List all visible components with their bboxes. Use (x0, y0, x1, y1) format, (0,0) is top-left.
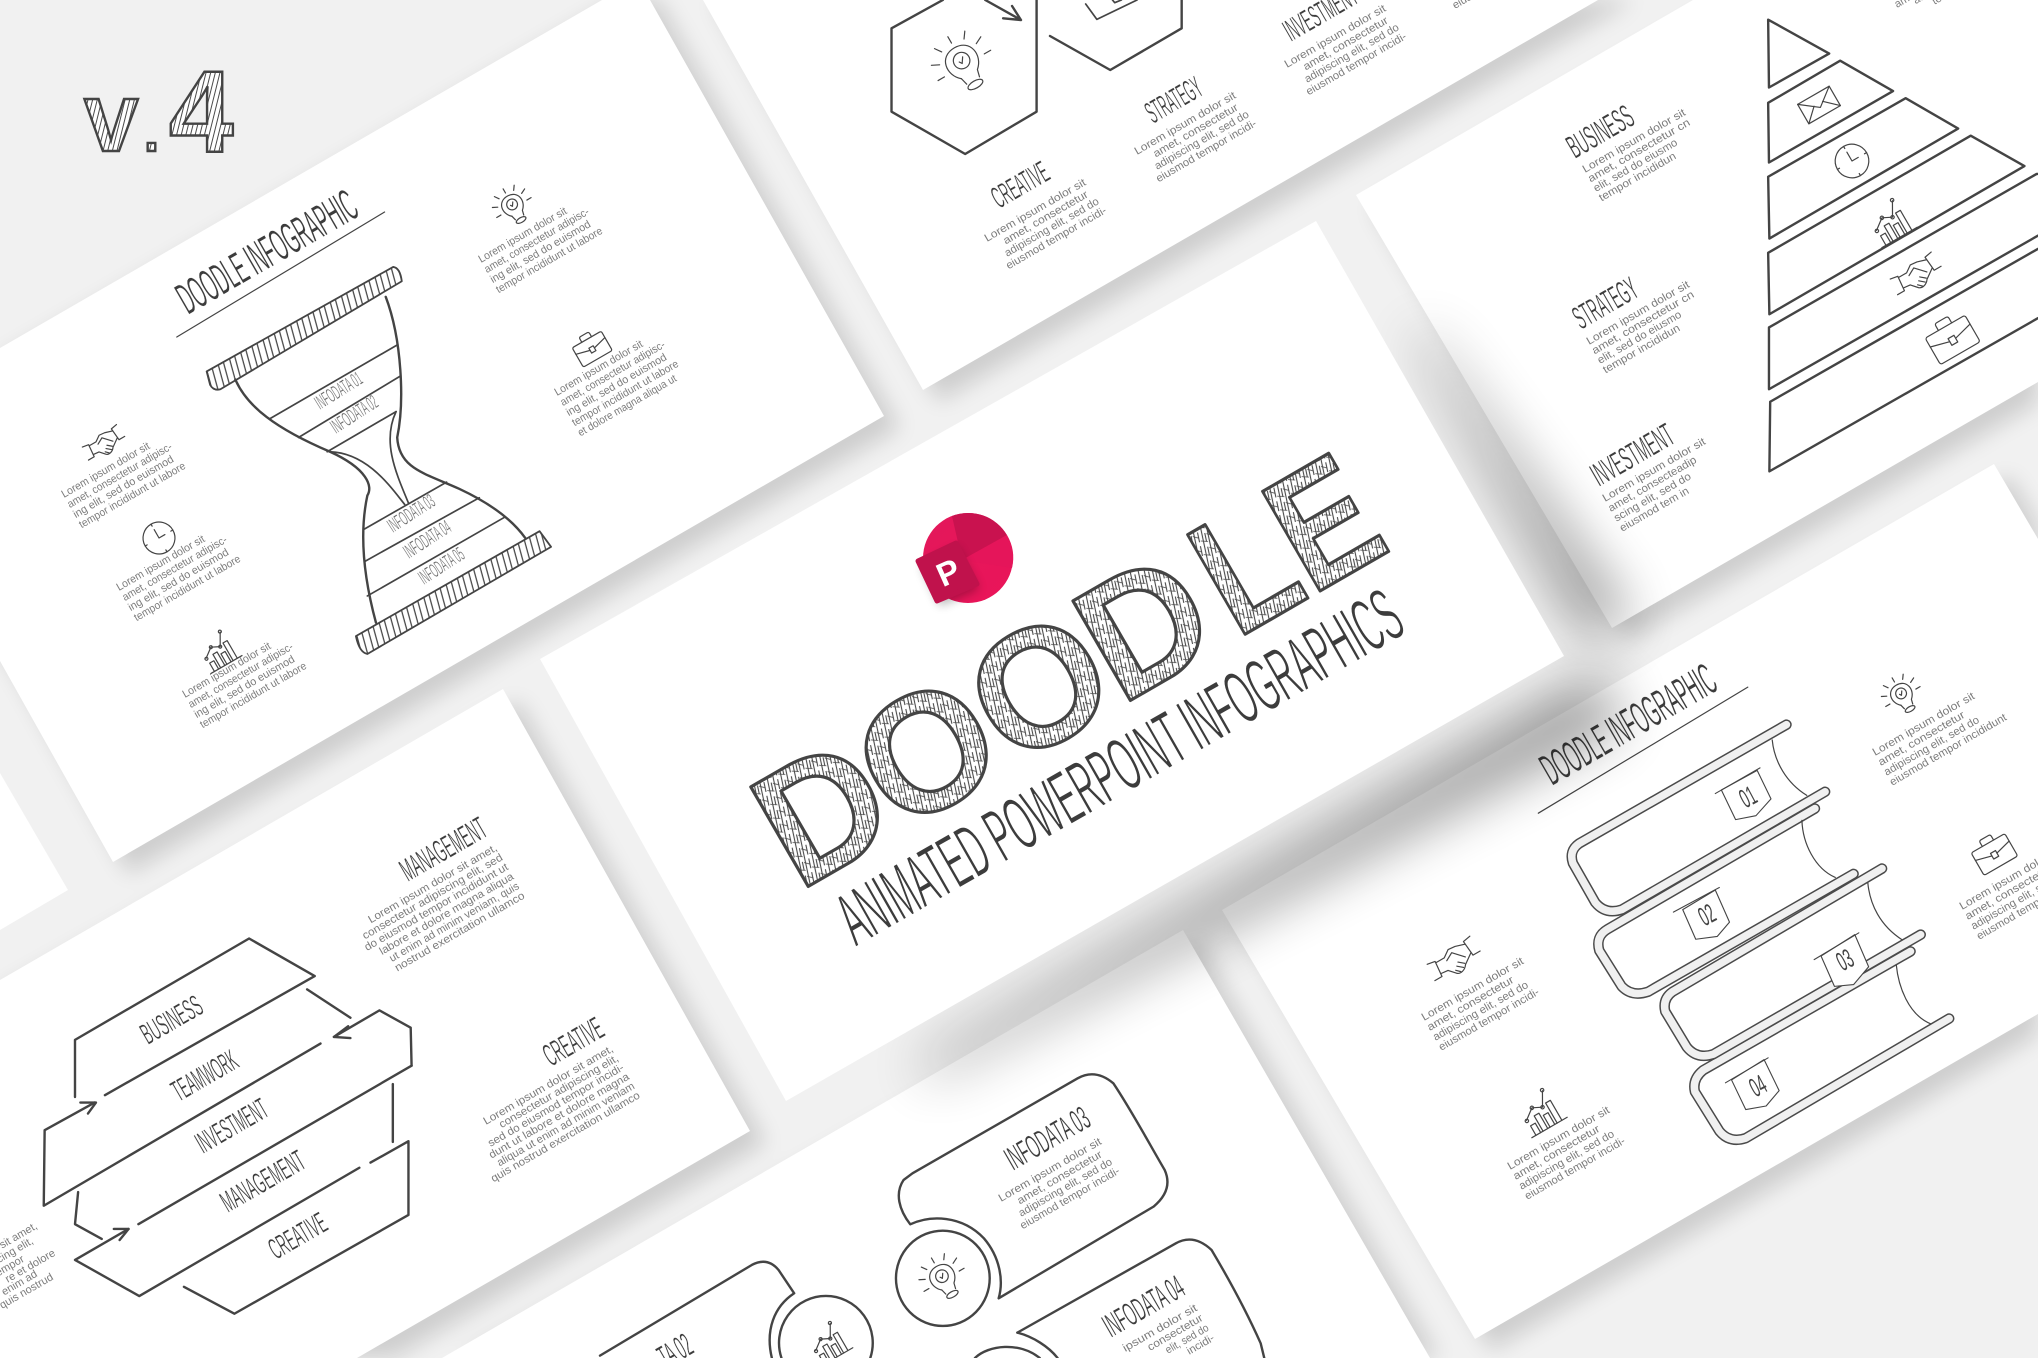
tag number 01: 01 (1734, 780, 1762, 814)
panel: cycle arrows slide: MANAGEMENT (394, 810, 493, 888)
text block: infodata 04: incidi- (1185, 1332, 1217, 1357)
stacked books diagram (1538, 687, 1949, 1140)
text block: creative: sed do eiusmod tempor incidi- (486, 1062, 626, 1150)
icon: bulb (922, 22, 1004, 103)
text block: business: Lorem ipsum dolor sit (1580, 107, 1688, 176)
text block: strategy: adipiscing elit, sed do (1153, 109, 1251, 173)
text block: chart: Lorem ipsum dolor sit (180, 640, 273, 701)
icon: bulb (911, 1246, 974, 1308)
text block: clock (114, 523, 243, 624)
text block: clipped at left edge: re et dolore (3, 1247, 58, 1285)
icon: briefcase (1921, 309, 1980, 365)
panel: cycle arrows slide: TEAMWORK (166, 1044, 244, 1108)
text block: investment: amet, consecteadip (1606, 454, 1699, 515)
bubble diagram (600, 1074, 1264, 1358)
panel: speech bubbles slide: INFODATA 04 (1096, 1268, 1191, 1344)
icon: clock (137, 516, 181, 560)
panel: pyramid slide: INVESTMENT (1584, 416, 1680, 493)
panel: cycle arrows slide: INVESTMENT (190, 1092, 274, 1160)
panel: cycle arrows slide: BUSINESS (135, 989, 209, 1051)
text block: infodata 03: eiusmod tempor incidi- (1018, 1165, 1122, 1232)
text block: creative: consectetur adipiscing elit, (497, 1052, 621, 1131)
text block: clock: Lorem ipsum dolor sit (114, 533, 207, 594)
text block: creative: eiusmod tempor incidi- (1004, 204, 1109, 272)
icon: chart (1513, 1085, 1567, 1138)
text block: infodata 03: adipiscing elit, sed do (1017, 1156, 1114, 1220)
text block: management: nostrud exercitation ullamco (393, 890, 527, 974)
panel: hourglass slide: INFODATA 04 (400, 516, 455, 563)
title: doodle: DOOD (724, 516, 1243, 923)
text block: business: amet, consectetur cn (1586, 117, 1692, 185)
text block: creative (982, 175, 1109, 274)
panel: hourglass slide (0, 0, 884, 862)
text block: strategy: amet, consectetur (1151, 101, 1241, 160)
text block: investment: adipiscing elit, sed do (1303, 22, 1401, 86)
text block: clock: tempor incididunt ut labore (132, 553, 243, 624)
text block: creative: amet, consectetur (1001, 188, 1091, 247)
text block: chart (1506, 1104, 1629, 1202)
panel: speech bubbles slide (442, 930, 1430, 1358)
icon: chart (1863, 195, 1917, 248)
text block: management: consectetur adipiscing elit, sed (360, 852, 505, 942)
text block: handshake: Lorem ipsum dolor sit (60, 440, 152, 501)
panel: hexagon slide (703, 0, 1598, 390)
text block: creative: adipiscing elit, sed do (1003, 196, 1101, 260)
text block: bulb: amet, consectetur (1876, 709, 1967, 769)
version label: 4 (169, 47, 234, 177)
text block: management: labore et dolore magna aliqua (377, 870, 517, 958)
icon: powerpoint logo (918, 513, 1013, 606)
text block: infodata 03 (996, 1135, 1122, 1234)
panel: pyramid slide: STRATEGY (1566, 270, 1644, 336)
text block: chart: amet, consectetur (1511, 1123, 1602, 1183)
text block: creative: Lorem ipsum dolor sit amet, (481, 1043, 616, 1128)
panel: hexagon slide: CREATIVE (985, 154, 1055, 215)
text block: investment: eiusmod tempor incidi- (1304, 30, 1409, 98)
panel: cycle arrows slide: CREATIVE (263, 1206, 333, 1266)
text block: bulb (1870, 682, 2009, 788)
text block: chart: tempor incididunt ut labore (198, 660, 309, 731)
hexagon diagram (892, 0, 1182, 154)
text block: clipped at left edge: enim ad (0, 1268, 40, 1298)
text block: briefcase: ing elit, sed do euismod (564, 351, 669, 419)
icon: clock (1829, 138, 1875, 184)
text block: infodata 04 (1121, 1302, 1217, 1358)
panel: hexagon slide: STRATEGY (1139, 70, 1208, 130)
panel: small slide at left edge (0, 773, 68, 930)
tag number 03: 03 (1831, 943, 1859, 977)
text block: bulb: Lorem ipsum dolor sit (1870, 690, 1977, 759)
icon: handshake (1424, 935, 1485, 986)
icon: briefcase (569, 326, 612, 367)
text block: clock: ing elit, sed do euismod (126, 546, 231, 614)
panel: cycle arrows slide: CREATIVE (536, 1010, 610, 1073)
text block: strategy: Lorem ipsum dolor sit (1132, 90, 1238, 158)
hourglass diagram (177, 212, 551, 654)
text block: business (1580, 107, 1704, 204)
title: doodle: LE (1162, 419, 1412, 670)
text block: strategy: elit, sed do eiusmo (1596, 309, 1684, 367)
text block: creative: quis nostrud exercitation ullamco (489, 1090, 642, 1185)
text block: briefcase (1958, 844, 2038, 942)
panel: pyramid slide: BUSINESS (1560, 98, 1640, 165)
panel: cycle arrows slide (0, 689, 750, 1358)
icon: handshake (1888, 251, 1945, 300)
text block: strategy: eiusmod tempor incidi- (1154, 117, 1259, 185)
text block: briefcase: amet, consectetur adipisc- (558, 339, 668, 409)
version label: . (144, 103, 159, 163)
text block: bulb: amet, consectetur adipisc- (482, 206, 592, 276)
text block: chart: amet, consectetur adipisc- (186, 641, 296, 711)
text block: clipped at left edge (0, 1220, 58, 1312)
text block: creative: aliqua ut enim ad minim veniam (495, 1080, 637, 1169)
panel: hourglass slide: INFODATA 02 (327, 391, 382, 438)
icon: chart (805, 1318, 853, 1358)
text block: business: elit, sed do eiusmo (1592, 137, 1680, 195)
icon: briefcase (1968, 828, 2018, 875)
text block: creative: Lorem ipsum dolor sit (982, 177, 1088, 245)
text block: briefcase (552, 328, 687, 439)
icon: chart (194, 627, 242, 674)
text block: bulb: ing elit, sed do euismod (488, 218, 593, 286)
tag number 04: 04 (1744, 1069, 1772, 1103)
panel: books slide: DOODLE INFOGRAPHIC (1532, 653, 1725, 795)
panel: cycle arrows slide: MANAGEMENT (215, 1144, 311, 1219)
text block: clock: amet, consectetur adipisc- (120, 534, 230, 604)
text block: bulb (476, 195, 605, 296)
text block: strategy: amet, consectetur cn (1590, 289, 1696, 357)
text block: investment: eiusmod tem in (1618, 485, 1691, 534)
text block: chart: ing elit, sed do euismod (192, 653, 297, 721)
panel: speech bubbles slide: INFODATA 03 (998, 1099, 1096, 1177)
panel: pyramid slide (1356, 0, 2038, 628)
panel: hourglass slide: INFODATA 01 (311, 368, 367, 414)
text block: creative (462, 1043, 643, 1185)
text block: business: tempor incididun (1597, 150, 1678, 204)
text block: management: Lorem ipsum dolor sit amet, (366, 842, 500, 926)
text block: strategy: Lorem ipsum dolor sit (1584, 279, 1692, 348)
tag number 02: 02 (1693, 898, 1721, 932)
icon: handshake (80, 424, 128, 464)
text block: investment: Lorem ipsum dolor sit (1282, 3, 1388, 71)
text block: chart: Lorem ipsum dolor sit (1506, 1104, 1612, 1173)
text block: handshake (1420, 955, 1543, 1053)
cycle arrows diagram (44, 938, 412, 1314)
panel: books slide (1222, 464, 2038, 1339)
text block: investment: amet, consectetur (1301, 14, 1391, 73)
text block: investment: Lorem ipsum dolor sit (1600, 436, 1708, 505)
text block: management (351, 842, 528, 982)
text block: strategy (1132, 88, 1259, 187)
text block: investment (1282, 1, 1409, 100)
text block: infodata 04: consectetur (1146, 1312, 1206, 1354)
text block: strategy (1584, 279, 1708, 376)
text block: bulb: adipiscing elit, sed do (1882, 714, 1982, 779)
version label: v (84, 62, 139, 172)
text block: creative: dunt ut labore et dolore magna (487, 1071, 632, 1161)
icon: powerpoint logo: P (931, 551, 966, 594)
text block: handshake: tempor incididunt ut labore (77, 460, 188, 531)
icon: envelope (1798, 86, 1840, 124)
text block: infodata 03: Lorem ipsum dolor sit (996, 1136, 1104, 1205)
text block: bulb: Lorem ipsum dolor sit (476, 205, 569, 266)
panel: hourglass slide: INFODATA 03 (384, 490, 439, 537)
text block: infodata 04: ipsum dolor sit (1121, 1302, 1200, 1355)
text block: handshake: eiusmod tempor incidi- (1437, 986, 1542, 1053)
text block: handshake: amet, consectetur adipisc- (65, 441, 175, 511)
text block: briefcase: et dolore magna aliqua ut (576, 373, 679, 439)
text block: management: do eiusmod tempor incididunt ut (362, 861, 510, 954)
text block: chart: eiusmod tempor incidi- (1523, 1135, 1628, 1202)
text block: infodata 03: amet, consectetur (1015, 1148, 1105, 1207)
text block: chart: adipiscing elit, sed do (1517, 1128, 1617, 1193)
text block: chart (180, 630, 309, 731)
icon: bulb (486, 179, 539, 232)
text block: management: ut enim ad minim veniam, quis (387, 880, 522, 965)
text block: bulb: tempor incididunt ut labore (494, 225, 605, 296)
text block: bulb: eiusmod tempor incididunt (1888, 712, 2009, 788)
text block: briefcase: Lorem ipsum dolor sit (552, 338, 645, 399)
icon: bulb (1875, 668, 1928, 721)
text fragment at top edge (1892, 0, 1966, 24)
panel: hourglass slide: DOODLE INFOGRAPHIC (168, 179, 366, 324)
text block: briefcase: tempor incididunt ut labore (570, 358, 681, 429)
text block: handshake: amet, consectetur (1425, 974, 1516, 1034)
center slide cast shadow: bottom edge (920, 677, 1622, 1077)
panel: hourglass slide: INFODATA 05 (415, 544, 469, 589)
text block: handshake: Lorem ipsum dolor sit (1420, 955, 1526, 1024)
text block: investment: scing elit, sed do (1612, 471, 1693, 525)
text block: handshake: adipiscing elit, sed do (1431, 979, 1531, 1044)
text block: strategy: tempor incididun (1601, 322, 1682, 376)
panel: center title slide (540, 221, 1564, 1101)
pyramid diagram (1768, 20, 2038, 471)
center slide cast shadow: right edge (1416, 331, 1629, 641)
text block: handshake (60, 430, 188, 531)
text block: handshake: ing elit, sed do euismod (71, 453, 176, 521)
text block: investment (1600, 436, 1725, 534)
text block: infodata 04: elit, sed do (1163, 1322, 1211, 1357)
